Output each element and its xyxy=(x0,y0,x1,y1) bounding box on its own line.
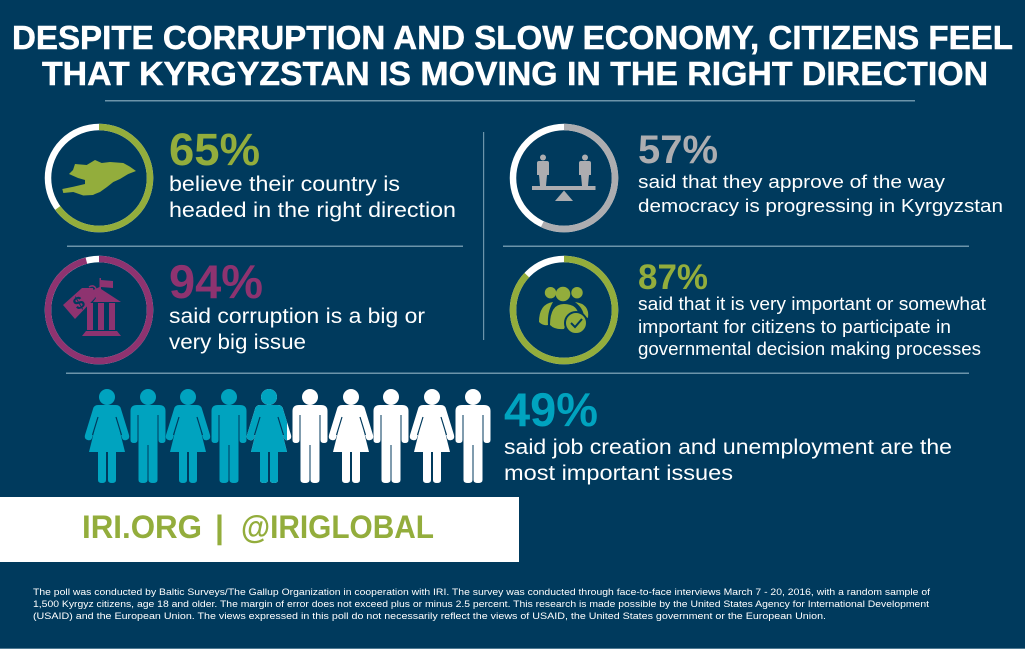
text: corruption xyxy=(169,305,425,354)
ring: 65 percent xyxy=(48,127,150,229)
text: right direction xyxy=(169,173,456,222)
icon: group of people with check mark xyxy=(539,287,588,334)
text: jobs xyxy=(504,436,952,485)
title xyxy=(12,19,1013,92)
text: participation: said that it is very important or somewhat xyxy=(638,294,986,314)
text: democracy: said that they approve of the way xyxy=(638,172,945,192)
footnote: (USAID) and the European Union. The views expressed in this poll do not necessarily reflect the views of USAID, the United States government or the European Union. xyxy=(33,611,826,622)
ring: 57 percent xyxy=(513,127,615,229)
text: participation xyxy=(638,294,986,359)
panel: 94% corruption xyxy=(48,255,425,361)
stat: 57%: 57% xyxy=(638,128,718,172)
stat: 49%: 49% xyxy=(504,383,598,436)
text: participation: important for citizens to participate in xyxy=(638,317,951,337)
icon: balance scale with two people xyxy=(532,154,596,201)
icon: map of Kyrgyzstan xyxy=(62,160,136,196)
stat: 65%: 65% xyxy=(169,124,260,175)
ring: 87 percent xyxy=(513,259,615,361)
text: democracy: democracy is progressing in Kyrgyzstan xyxy=(638,196,1003,216)
banner: web and social handle: IRI.ORG xyxy=(82,509,202,545)
title: DESPITE CORRUPTION AND SLOW ECONOMY, CITIZENS FEEL xyxy=(12,19,1013,56)
footnote: The poll was conducted by Baltic Surveys/The Gallup Organization in cooperation with IRI. The survey was conducted through face-to-face interviews March 7 - 20, 2016, with a random sample of xyxy=(33,587,930,598)
panel: 49% jobs xyxy=(85,383,952,485)
text: corruption: said corruption is a big or xyxy=(169,305,425,328)
stat: 87%: 87% xyxy=(638,258,708,297)
footnote xyxy=(33,587,930,622)
text: right direction: headed in the right direction xyxy=(169,199,456,222)
text: right direction: believe their country is xyxy=(169,173,400,196)
panel: 65% right direction xyxy=(48,124,456,229)
banner: web and social handle xyxy=(0,497,519,562)
text: participation: governmental decision making processes xyxy=(638,339,981,359)
title: THAT KYRGYZSTAN IS MOVING IN THE RIGHT DIRECTION xyxy=(42,55,988,92)
stat: 94%: 94% xyxy=(169,255,263,308)
pictogram: ten people xyxy=(85,389,491,483)
banner: web and social handle: | xyxy=(215,509,224,545)
text: jobs: most important issues xyxy=(504,462,733,485)
text: jobs: said job creation and unemployment are the xyxy=(504,436,952,459)
text: corruption: very big issue xyxy=(169,331,306,354)
icon: bank with price tag xyxy=(63,278,121,336)
banner: web and social handle: @IRIGLOBAL xyxy=(241,509,434,545)
icon: bank with price tag: $ xyxy=(70,292,88,314)
text: democracy xyxy=(638,172,1003,216)
footnote: 1,500 Kyrgyz citizens, age 18 and older. The margin of error does not exceed plus or minus 2.5 percent. This research is made possible by the United States Agency for International Development xyxy=(33,599,929,610)
panel: 57% democracy xyxy=(513,127,1003,229)
ring: 94 percent xyxy=(48,259,150,361)
panel: 87% participation xyxy=(513,258,986,361)
